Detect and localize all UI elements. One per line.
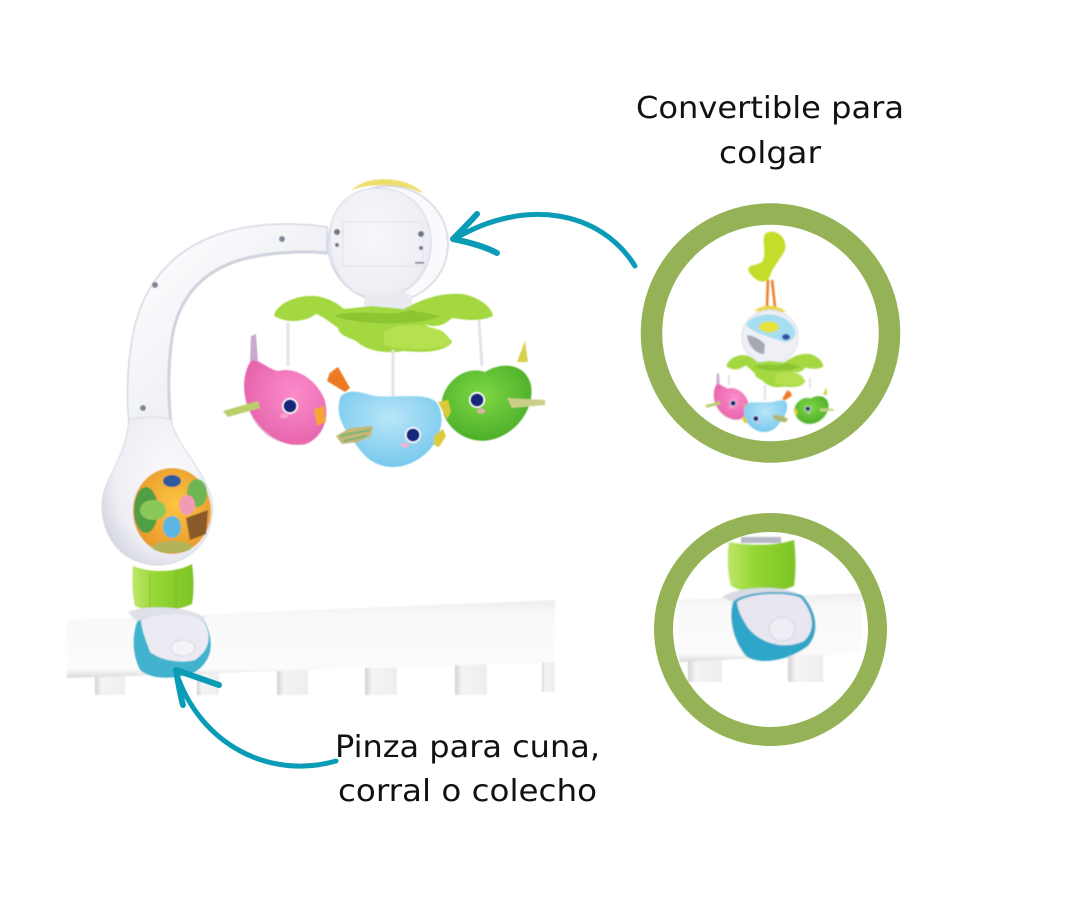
ring: clamp close-up [664, 522, 878, 736]
strings [288, 320, 482, 396]
crib rail and bars [67, 600, 555, 695]
neck and leaves [364, 293, 412, 309]
illustration: crib mobile attached to rail [67, 179, 555, 695]
mini mobile [726, 354, 823, 387]
green bird [438, 341, 545, 441]
close-up collar [741, 537, 781, 543]
label: convertible para colgar [636, 91, 904, 171]
pink bird [223, 334, 326, 445]
music box head [328, 179, 448, 302]
label: convertible para colgar: colgar [719, 136, 822, 171]
label: convertible para colgar: Convertible para [636, 91, 904, 126]
support arm [127, 224, 327, 424]
blue bird [327, 367, 446, 467]
mini hanging clip [748, 232, 785, 282]
close-up crib bars and rail [688, 655, 722, 682]
mini music box [742, 306, 798, 364]
arrow: to music box [453, 214, 635, 266]
lower bulb with picture sticker [102, 417, 212, 565]
label: pinza para cuna, corral o colecho [335, 730, 600, 809]
mini strap [767, 280, 775, 307]
green collar [132, 564, 194, 610]
close-up clamp [722, 588, 800, 604]
arrow: to clamp [176, 670, 336, 766]
ring: hanging mobile [652, 214, 890, 452]
label: pinza para cuna, corral o colecho: Pinza para cuna, [335, 730, 600, 765]
crib clamp [128, 607, 211, 678]
label: pinza para cuna, corral o colecho: corral o colecho [338, 774, 597, 809]
